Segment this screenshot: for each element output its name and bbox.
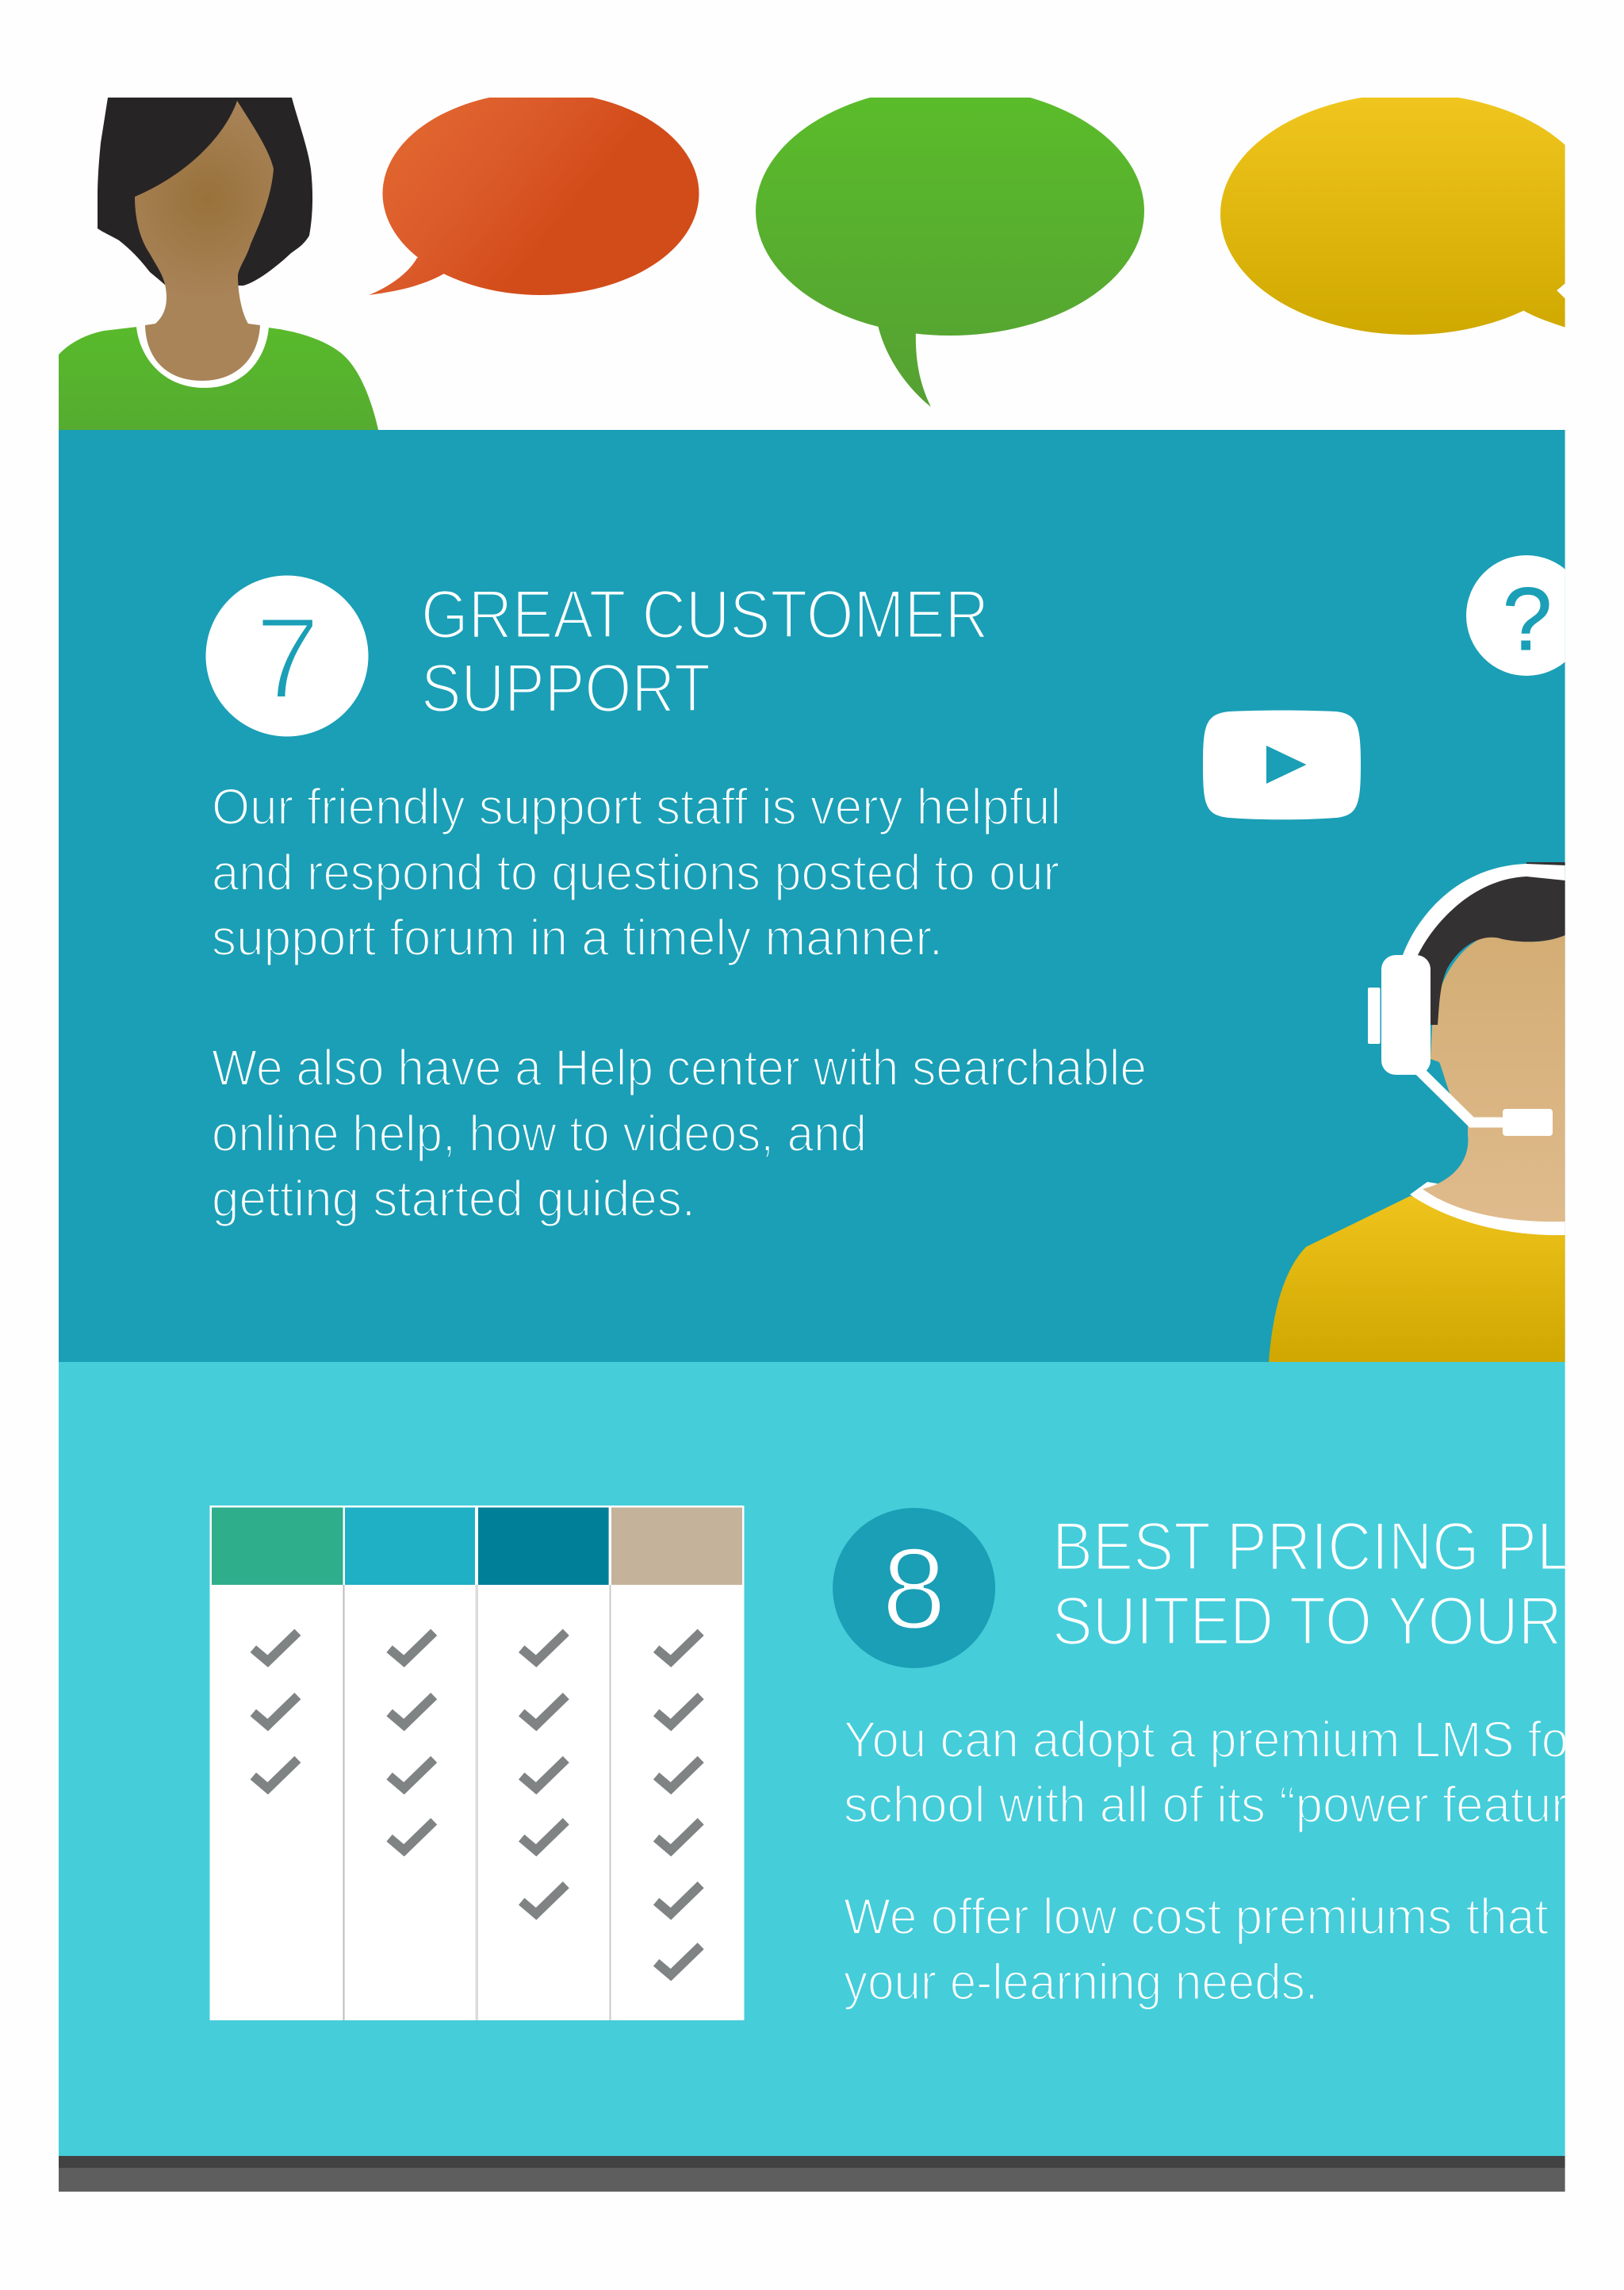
heading: great customer support: GREAT CUSTOMER [421,577,989,653]
white collar [1410,1182,1565,1235]
icon: support agent [1269,862,1565,1362]
text block: help center: getting started guides. [212,1170,695,1227]
yellow shirt [1269,1196,1565,1362]
text block: support staff: support forum in a timely manner. [212,909,943,966]
number badge 8: 8 [882,1524,946,1653]
icon: question mark bubble: ? [1503,570,1552,669]
text block: low cost premiums: your e-learning needs. [844,1954,1318,2011]
number badge 7 [206,576,368,736]
text block: help center: online help, how to videos, and [212,1105,867,1162]
face and neck [1423,934,1565,1222]
icon: woman avatar [59,98,378,430]
text block: support staff [212,778,1061,966]
checks column 1 [253,1632,297,1789]
number badge 7: 7 [255,593,320,723]
hair [98,98,312,286]
icon: video play button [1203,711,1361,819]
text block: support staff: and respond to questions posted to our [212,844,1059,901]
ear cup [1381,955,1431,1075]
icon: question mark bubble [1466,555,1565,676]
checks column 3 [522,1632,566,1914]
icon: green speech bubble [756,86,1144,407]
text block: premium LMS: school with all of its “power features” [844,1777,1624,1833]
footer bar [59,2156,1565,2192]
face and neck [135,101,274,381]
heading: great customer support [425,591,984,711]
panel: best pricing plans [59,1362,1624,2156]
microphone [1503,1109,1553,1136]
table header colours [212,1507,742,1585]
hair [1418,862,1565,1025]
pricing table [209,1506,744,2020]
microphone arm [1419,1071,1507,1122]
ear cup side [1368,988,1380,1044]
checks column 2 [389,1632,434,1851]
panel: great customer support [59,430,1587,1362]
heading: best pricing plans [1056,1523,1565,1644]
checks column 4 [657,1632,701,1975]
text block: support staff: Our friendly support staff is very helpful [212,778,1061,835]
text block: help center [212,1039,1147,1227]
heading: great customer support: SUPPORT [421,650,710,727]
white collar [136,327,269,388]
text block: premium LMS [845,1721,1565,1832]
green shirt [59,327,378,430]
icon: orange speech bubble [369,92,699,295]
icon: yellow speech bubble [1220,98,1565,335]
number badge 8 [833,1508,995,1668]
text block: help center: We also have a Help center with searchable [212,1039,1147,1096]
panel: speech header [59,86,1599,430]
text block: low cost premiums [844,1889,1624,2011]
headset band [1403,864,1565,955]
